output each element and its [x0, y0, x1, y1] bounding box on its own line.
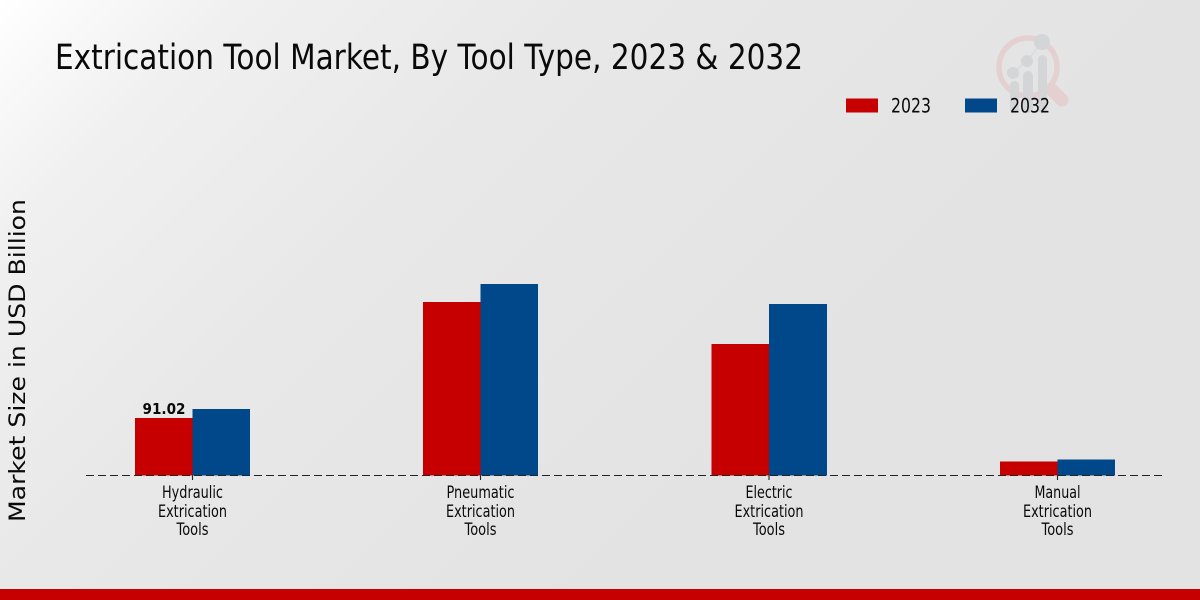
category label: Pneumatic Extrication Tools [446, 483, 515, 540]
legend [846, 94, 1050, 118]
data label: 91.02: 91.02 [142, 400, 186, 418]
footer bar [0, 589, 1200, 600]
category label: Hydraulic Extrication Tools: Hydraulic [162, 483, 223, 503]
category label: Pneumatic Extrication Tools: Extrication [446, 502, 515, 522]
bars: Electric Extrication Tools [712, 304, 827, 476]
category label: Manual Extrication Tools: Extrication [1023, 502, 1092, 522]
category label: Hydraulic Extrication Tools: Extrication [158, 502, 227, 522]
legend: 2032 [965, 94, 1050, 118]
category label: Manual Extrication Tools [1023, 483, 1092, 540]
category label: Electric Extrication Tools: Tools [752, 520, 785, 540]
bars: Pneumatic Extrication Tools [423, 284, 538, 476]
category label: Manual Extrication Tools: Manual [1034, 483, 1080, 503]
category label: Pneumatic Extrication Tools: Tools [464, 520, 497, 540]
category label: Hydraulic Extrication Tools: Tools [176, 520, 209, 540]
icon: watermark logo [999, 34, 1062, 113]
category label: Electric Extrication Tools: Electric [746, 483, 792, 503]
baseline axis [86, 476, 1164, 480]
category label: Electric Extrication Tools: Extrication [734, 502, 804, 522]
legend: 2032: 2032 [1010, 94, 1050, 118]
bars: Hydraulic Extrication Tools [135, 409, 250, 476]
category label: Hydraulic Extrication Tools [158, 483, 227, 540]
legend: 2023: 2023 [891, 94, 931, 118]
legend: 2023 [846, 94, 931, 118]
category label: Pneumatic Extrication Tools: Pneumatic [446, 483, 514, 503]
bars: Manual Extrication Tools [1000, 460, 1115, 476]
y axis label: Market Size in USD Billion [5, 199, 31, 522]
category label: Electric Extrication Tools [734, 483, 804, 540]
bar chart [86, 284, 1164, 480]
category label: Manual Extrication Tools: Tools [1041, 520, 1074, 540]
title: Extrication Tool Market, By Tool Type, 2023 & 2032 [55, 38, 803, 78]
